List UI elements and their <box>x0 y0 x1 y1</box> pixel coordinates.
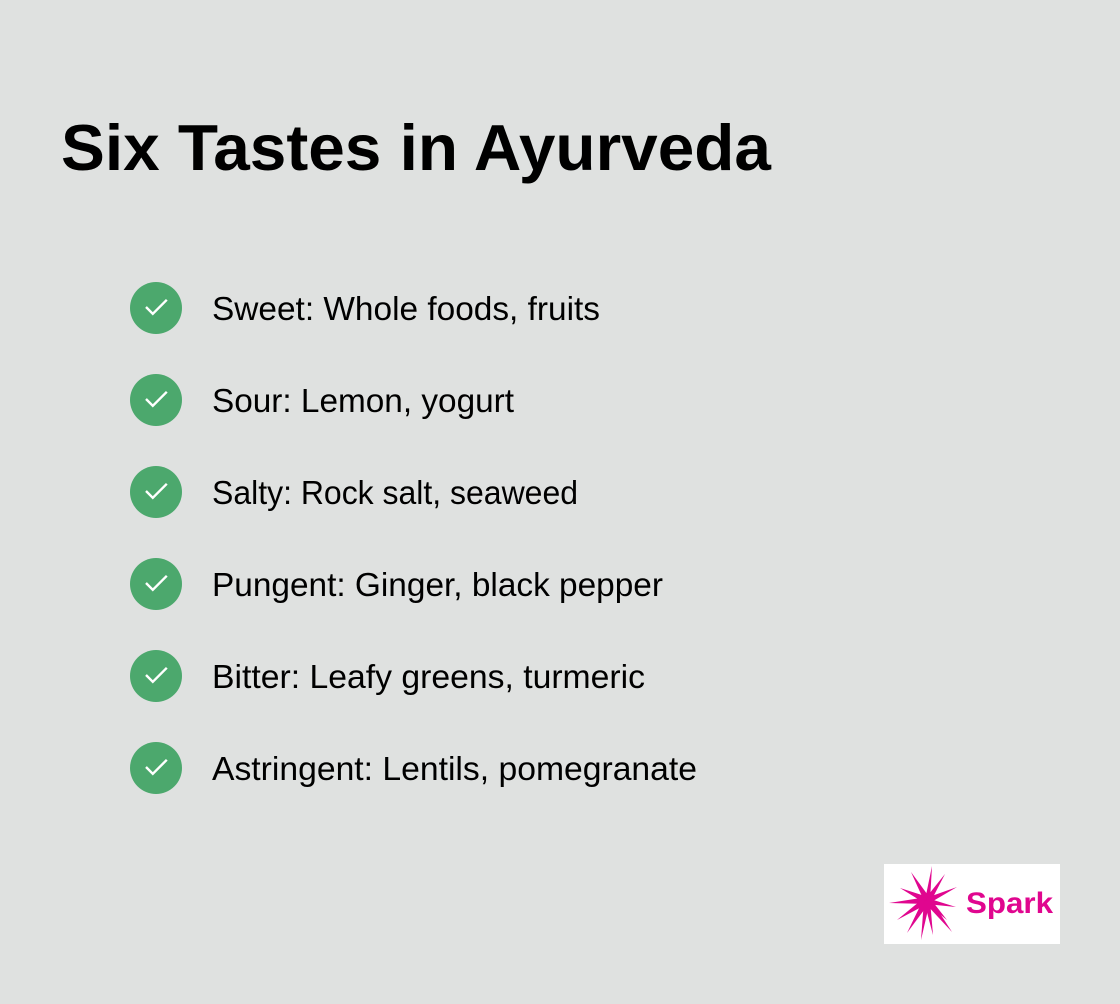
title: Six Tastes in Ayurveda <box>61 111 772 184</box>
item: sour: Sour: Lemon, yogurt <box>212 382 514 419</box>
checklist <box>130 282 697 794</box>
item: pungent: Pungent: Ginger, black pepper <box>212 566 663 603</box>
item: pungent <box>130 558 663 610</box>
item: salty <box>130 466 578 518</box>
item: bitter: Bitter: Leafy greens, turmeric <box>212 658 645 695</box>
item: astringent: Astringent: Lentils, pomegranate <box>212 750 697 787</box>
item: astringent <box>130 742 697 794</box>
icon: spark starburst <box>889 866 957 940</box>
logo wordmark: Spark <box>966 887 1053 920</box>
item: sour <box>130 374 514 426</box>
item: salty: Salty: Rock salt, seaweed <box>212 474 578 511</box>
item: sweet <box>130 282 600 334</box>
item: bitter <box>130 650 645 702</box>
logo: Spark <box>884 864 1060 944</box>
item: sweet: Sweet: Whole foods, fruits <box>212 290 600 327</box>
